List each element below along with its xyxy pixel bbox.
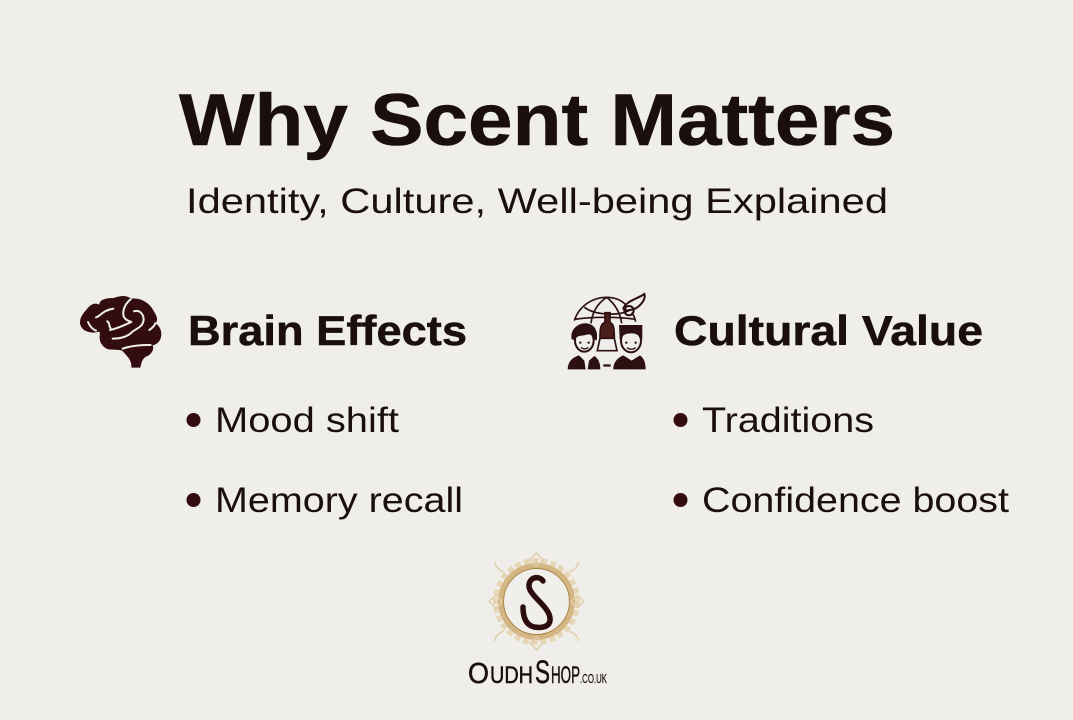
- panel: cultural value: [568, 294, 1009, 520]
- bullet: Memory recall: Memory recall: [215, 481, 463, 520]
- heading: Brain Effects: Brain Effects: [188, 307, 467, 354]
- bullet: Confidence boost: Confidence boost: [702, 481, 1009, 520]
- bullet: Mood shift: Mood shift: [215, 401, 399, 440]
- wordmark: HOP: [551, 662, 580, 689]
- wordmark: .CO.UK: [580, 671, 607, 686]
- panel: brain effects: [80, 296, 467, 520]
- icon: globe, bell and two people: [568, 294, 646, 369]
- icon: brain: [80, 296, 161, 368]
- bullet: Traditions: Traditions: [702, 401, 874, 440]
- heading: Cultural Value: Cultural Value: [674, 307, 983, 354]
- icon: gold ornamental S crest: [489, 553, 584, 650]
- logo: OudhShop: [468, 553, 607, 690]
- wordmark: O: [468, 658, 489, 690]
- wordmark: S: [535, 654, 550, 690]
- subtitle: Identity, Culture, Well-being Explained: [186, 182, 888, 221]
- wordmark: UDH: [490, 662, 533, 689]
- title: Why Scent Matters: [179, 80, 895, 161]
